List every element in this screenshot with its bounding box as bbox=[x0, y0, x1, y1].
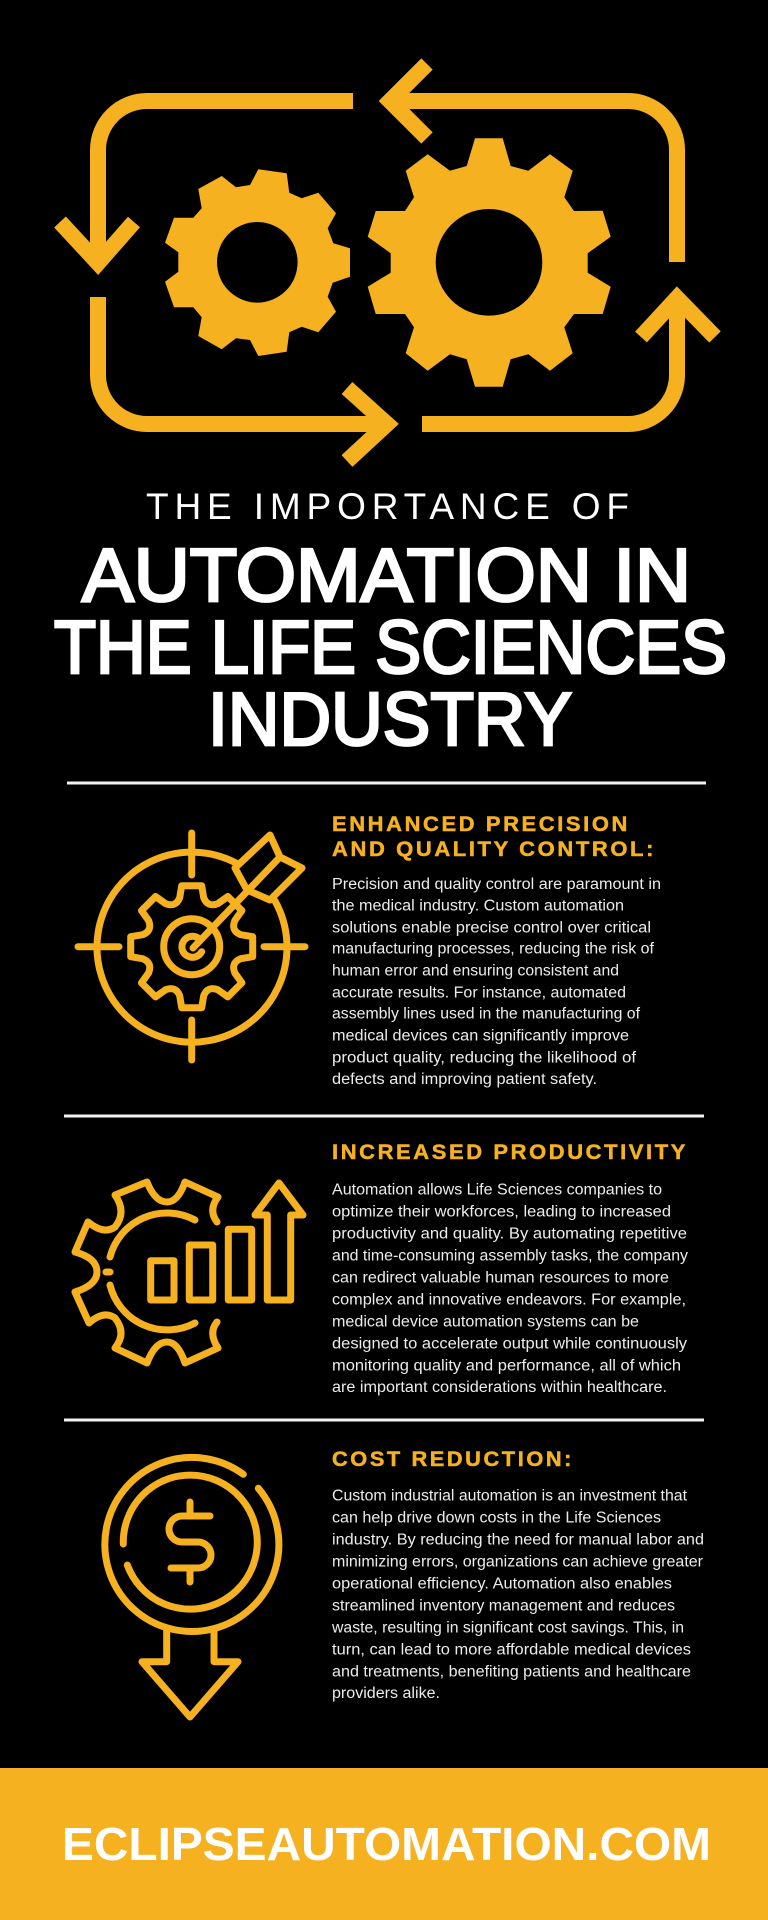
body text: manufacturing processes, reducing the risk of bbox=[332, 941, 655, 958]
icon: target with gear and arrow bbox=[78, 833, 305, 1060]
body text: turn, can lead to more affordable medical devices bbox=[332, 1642, 691, 1659]
panel: cost reduction bbox=[105, 1448, 704, 1717]
body text: human error and ensuring consistent and bbox=[332, 962, 619, 979]
body text: industry. By reducing the need for manual labor and bbox=[332, 1532, 704, 1549]
arrow: upper right, pointing left bbox=[390, 64, 677, 262]
body text: solutions enable precise control over critical bbox=[332, 919, 651, 936]
body text: and time-consuming assembly tasks, the company bbox=[332, 1247, 688, 1264]
icon: small gear bbox=[165, 169, 350, 356]
body text: operational efficiency. Automation also enables bbox=[332, 1576, 672, 1593]
body text: minimizing errors, organizations can achieve greater bbox=[332, 1554, 703, 1571]
body text: product quality, reducing the likelihood of bbox=[332, 1050, 637, 1067]
body text: Precision and quality control are paramount in bbox=[332, 876, 661, 893]
body text: are important considerations within healthcare. bbox=[332, 1379, 667, 1396]
heading: AND QUALITY CONTROL: bbox=[332, 838, 656, 861]
main title line 3: INDUSTRY bbox=[208, 677, 572, 761]
arrow: right, pointing up bbox=[422, 298, 715, 424]
body text: productivity and quality. By automating repetitive bbox=[332, 1225, 687, 1242]
heading: ENHANCED PRECISION bbox=[332, 813, 630, 836]
panel: increased productivity bbox=[75, 1141, 688, 1396]
body text: Automation allows Life Sciences companies to bbox=[332, 1181, 662, 1198]
body text: accurate results. For instance, automated bbox=[332, 984, 626, 1001]
icon: dollar coin with down arrow bbox=[105, 1457, 279, 1717]
body text: monitoring quality and performance, all of which bbox=[332, 1358, 681, 1375]
footer band bbox=[0, 1768, 768, 1920]
heading: INCREASED PRODUCTIVITY bbox=[332, 1141, 688, 1164]
icon: gear with rising bar chart bbox=[75, 1182, 303, 1363]
title block bbox=[54, 486, 727, 761]
main title line 1: AUTOMATION IN bbox=[82, 533, 691, 617]
body text: complex and innovative endeavors. For example, bbox=[332, 1291, 686, 1308]
body text: providers alike. bbox=[332, 1685, 440, 1702]
body text: optimize their workforces, leading to increased bbox=[332, 1203, 671, 1220]
icon: large gear bbox=[368, 138, 611, 387]
body text: medical devices can significantly improve bbox=[332, 1028, 629, 1045]
arrow: bottom, pointing right bbox=[98, 297, 390, 461]
panel: enhanced precision and quality control bbox=[78, 813, 661, 1088]
subtitle: THE IMPORTANCE OF bbox=[146, 486, 629, 527]
main title line 2: THE LIFE SCIENCES bbox=[54, 605, 727, 689]
body text: can help drive down costs in the Life Sciences bbox=[332, 1510, 661, 1527]
body text bbox=[332, 1181, 688, 1396]
body text: designed to accelerate output while continuously bbox=[332, 1336, 687, 1353]
arrow: top, pointing left bbox=[60, 101, 353, 263]
heading bbox=[332, 813, 656, 861]
body text: Custom industrial automation is an investment that bbox=[332, 1488, 688, 1505]
body text: medical device automation systems can be bbox=[332, 1314, 639, 1331]
body text bbox=[332, 876, 661, 1088]
body text bbox=[331, 1488, 704, 1702]
body text: defects and improving patient safety. bbox=[332, 1071, 597, 1088]
body text: waste, resulting in significant cost savings. This, in bbox=[331, 1620, 684, 1637]
heading: COST REDUCTION: bbox=[332, 1448, 574, 1471]
body text: and treatments, benefiting patients and healthcare bbox=[332, 1664, 691, 1681]
body text: assembly lines used in the manufacturing of bbox=[332, 1006, 641, 1023]
body text: can redirect valuable human resources to more bbox=[332, 1269, 669, 1286]
footer website URL: ECLIPSEAUTOMATION.COM bbox=[62, 1818, 711, 1870]
icon: gears inside circular arrows bbox=[60, 64, 715, 461]
body text: the medical industry. Custom automation bbox=[332, 898, 624, 914]
body text: streamlined inventory management and reduces bbox=[332, 1598, 675, 1615]
